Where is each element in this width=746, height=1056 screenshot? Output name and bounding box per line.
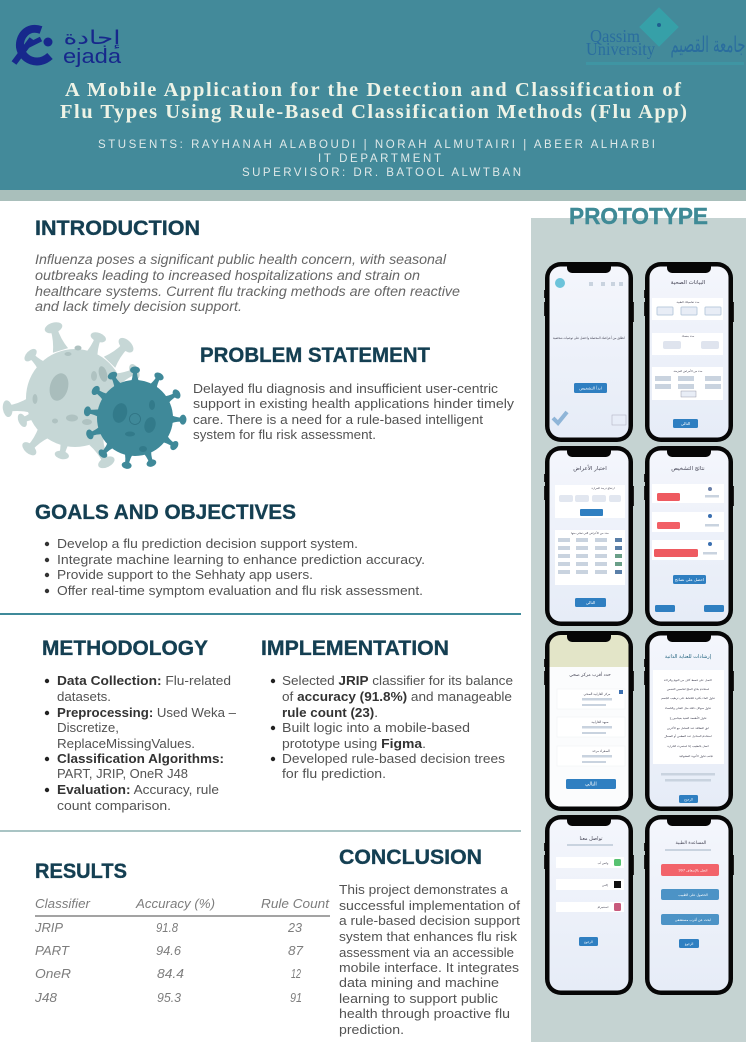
phone: self care guide: تناول الماء بكثرة للحفاظ على ترطيب الجسم <box>661 696 715 700</box>
table: results: 91 <box>290 990 302 1005</box>
authors and supervisor <box>98 139 655 179</box>
light virus <box>2 320 142 471</box>
phone: self care guide: إرشادات للعناية الذاتية <box>665 654 712 660</box>
phone: self care guide: استخدم بخاخ الملح لتحسين التنفس <box>667 687 709 692</box>
phone: medical help: الحصول على الطبيب <box>678 893 708 897</box>
phone: nearest health center: حدد أقرب مركز صحي <box>569 671 611 678</box>
phone: medical help: اتصل بالإسعاف 997 <box>679 868 708 874</box>
phone: health data <box>644 262 734 442</box>
phone: nearest health center <box>544 631 634 811</box>
text: introduction: and lack timely decision support. <box>35 299 242 314</box>
phone: symptom test: ارتفاع درجة الحرارة <box>591 486 615 490</box>
table: results: 23 <box>287 920 303 935</box>
phone: medical help: المساعدة الطبية <box>676 841 706 846</box>
logo: Qassim University <box>586 7 746 65</box>
logo: Qassim University: Qassim <box>590 26 640 46</box>
text: problem statement: system for flu risk assessment. <box>193 427 376 442</box>
logo: ejada: ejada <box>63 46 122 68</box>
phone: self care guide: احصل على قسط كاف من النوم والراحة <box>664 678 712 683</box>
text: conclusion: prediction. <box>339 1022 404 1037</box>
phone: contact us <box>544 815 634 995</box>
logo: Qassim University: University <box>586 39 655 59</box>
list: goals: Provide support to the Sehhaty app users. <box>57 567 313 582</box>
table: results <box>34 896 330 1005</box>
heading: implementation: IMPLEMENTATION <box>261 636 449 660</box>
phone: self care guide: تناول سوائل دافئة مثل الشاي والحساء <box>665 706 711 710</box>
list: methodology: Preprocessing: Used Weka – <box>57 705 237 720</box>
text: conclusion: data mining and machine <box>339 975 499 990</box>
logo: ejada <box>14 27 122 68</box>
phone: start screen <box>544 262 634 442</box>
phone: medical help: ابحث عن أقرب مستشفى <box>675 917 711 922</box>
text: introduction: outbreaks leading to increased hospitalizations and strain on <box>35 268 420 283</box>
text: conclusion: system that enhances flu risk <box>339 929 518 944</box>
heading: methodology: METHODOLOGY <box>42 636 208 660</box>
list: goals <box>45 536 425 598</box>
text: problem statement: care. There is a need for a rule-based intelligent <box>193 412 483 427</box>
list: methodology: ReplaceMissingValues. <box>57 736 195 751</box>
text: conclusion: successful implementation of <box>339 898 520 913</box>
list: methodology: count comparison. <box>57 798 171 813</box>
text: conclusion: assessment via an accessible <box>339 945 514 960</box>
list: goals: Offer real-time symptom evaluation and flu risk assessment. <box>57 583 423 598</box>
phone: health data: حدد من الأمراض المزمنة <box>674 369 703 373</box>
heading: prototype: PROTOTYPE <box>569 203 708 229</box>
phone: self care guide: ابق النظافة عند التعامل مع الآخرين <box>667 726 709 730</box>
text: problem statement: Delayed flu diagnosis and insufficient user-centric <box>193 381 499 396</box>
phone: diagnosis results <box>644 446 734 626</box>
logo: ejada: إجادة <box>64 27 120 50</box>
list: implementation: Selected JRIP classifier for its balance <box>282 673 513 688</box>
table: results: J48 <box>34 990 58 1005</box>
phone: health data: البيانات الصحية <box>671 280 706 286</box>
heading: conclusion: CONCLUSION <box>339 845 482 869</box>
phone: contact us: إكس <box>602 883 608 888</box>
phone: self care guide: تناول الأطعمة الغنية بفيتامين ج <box>670 716 707 720</box>
text: conclusion: health through proactive flu <box>339 1006 510 1021</box>
phone: diagnosis results: نتائج التشخيص <box>671 466 705 472</box>
phone: nearest health center: صيهد الفارابية <box>591 720 609 724</box>
authors and supervisor: IT DEPARTMENT <box>318 153 441 165</box>
text: conclusion: a rule-based decision support <box>339 913 520 928</box>
text: conclusion: This project demonstrates a <box>339 882 509 897</box>
phone: health data: حدد تفاصيلك الطبية <box>677 300 700 304</box>
dark virus <box>83 366 187 470</box>
phone: medical help <box>644 815 734 995</box>
table: results: 12 <box>291 966 302 981</box>
table: results: OneR <box>35 966 71 981</box>
list: implementation: for flu prediction. <box>282 766 386 781</box>
authors and supervisor: SUPERVISOR: DR. BATOOL ALWTBAN <box>242 167 521 179</box>
list: methodology: Evaluation: Accuracy, rule <box>57 782 219 797</box>
list: implementation: rule count (23). <box>282 705 378 720</box>
phone: nearest health center: مركز الفارابية الصحي <box>584 692 611 696</box>
list: implementation: prototype using Figma. <box>282 736 426 751</box>
list: methodology: Data Collection: Flu-related <box>57 673 231 688</box>
list: implementation: of accuracy (91.8%) and manageable <box>282 689 512 704</box>
text: conclusion: mobile interface. It integrates <box>339 960 520 975</box>
text: conclusion <box>339 882 520 1037</box>
phone: contact us: انستجرام <box>598 905 609 910</box>
phone: symptom test: اختبار الأعراض <box>573 464 607 472</box>
header banner <box>0 0 746 201</box>
text: problem statement: support in existing health applications hinder timely <box>193 396 515 411</box>
text: introduction <box>35 252 460 314</box>
phone: self care guide: تجنب تناول الأدوية العشوائية <box>679 754 713 758</box>
table: results: PART <box>35 943 70 958</box>
title: Flu Types Using Rule-Based Classification Methods (Flu App) <box>60 101 687 123</box>
title <box>60 79 687 123</box>
phone: start screen: انطلق من أعراضك المحتملة واحصل على توصيات شخصية <box>553 335 625 340</box>
phone: self care guide: اتصل بالطبيب إذا استمرت الحرارة <box>667 744 709 749</box>
phone: self care guide: استخدم المناديل عند العطس أو السعال <box>664 734 712 739</box>
table: results: 94.6 <box>156 943 182 958</box>
phone: self care guide <box>644 631 734 811</box>
text: introduction: Influenza poses a significant public health concern, with seasonal <box>35 252 447 267</box>
phone: diagnosis results: احصل على نصائح <box>675 577 704 582</box>
list: goals: Integrate machine learning to enhance prediction accuracy. <box>57 552 425 567</box>
table: results: 95.3 <box>157 990 182 1005</box>
list: methodology <box>45 673 237 813</box>
phone: contact us: الرجوع <box>584 940 593 944</box>
heading: introduction: INTRODUCTION <box>35 216 200 240</box>
phone: nearest health center: التالي <box>585 782 597 788</box>
list: methodology: Classification Algorithms: <box>57 751 224 766</box>
phone: contact us: واتس آب <box>598 861 609 865</box>
table: results: 91.8 <box>156 920 179 935</box>
heading: results: RESULTS <box>35 859 127 883</box>
table: results: 84.4 <box>157 966 184 981</box>
panel: prototype <box>531 203 746 1042</box>
phone: start screen: ابدأ التشخيص <box>579 386 602 390</box>
list: implementation: Developed rule-based decision trees <box>282 751 506 766</box>
list: goals: Develop a flu prediction decision support system. <box>57 536 358 551</box>
phone: symptom test <box>544 446 634 626</box>
heading: goals and objectives: GOALS AND OBJECTIVES <box>35 500 296 524</box>
phone: medical help: الرجوع <box>685 942 693 946</box>
list: methodology: PART, JRIP, OneR J48 <box>57 766 188 781</box>
phone: contact us: تواصل معنا <box>579 836 603 842</box>
list: methodology: datasets. <box>57 689 111 704</box>
phone: self care guide: الرجوع <box>684 798 693 802</box>
table: results: JRIP <box>34 920 63 935</box>
text: introduction: healthcare systems. Current flu tracking methods are often reactive <box>35 284 460 299</box>
authors and supervisor: STUSENTS: RAYHANAH ALABOUDI | NORAH ALMUTAIRI | ABEER ALHARBI <box>98 139 655 151</box>
table: results: Accuracy (%) <box>135 896 215 911</box>
list: methodology: Discretize, <box>57 720 119 735</box>
illustration: virus <box>2 320 187 471</box>
list: implementation <box>271 673 513 781</box>
heading: problem statement: PROBLEM STATEMENT <box>200 343 430 367</box>
text: problem statement <box>193 381 515 442</box>
phone: symptom test: التالي <box>586 600 595 605</box>
table: results: Rule Count <box>261 896 330 911</box>
phone: nearest health center: الصفراء مرحة <box>592 749 610 753</box>
list: implementation: Built logic into a mobile-based <box>282 720 470 735</box>
table: results: Classifier <box>35 896 91 911</box>
text: conclusion: learning to support public <box>339 991 499 1006</box>
table: results: 87 <box>288 943 304 958</box>
phone: health data: حدد جنسك <box>682 334 695 338</box>
phone: symptom test: حدد من الأعراض التي تعاني منها <box>571 531 609 535</box>
phone: health data: التالي <box>681 421 690 426</box>
title: A Mobile Application for the Detection and Classification of <box>65 79 682 101</box>
